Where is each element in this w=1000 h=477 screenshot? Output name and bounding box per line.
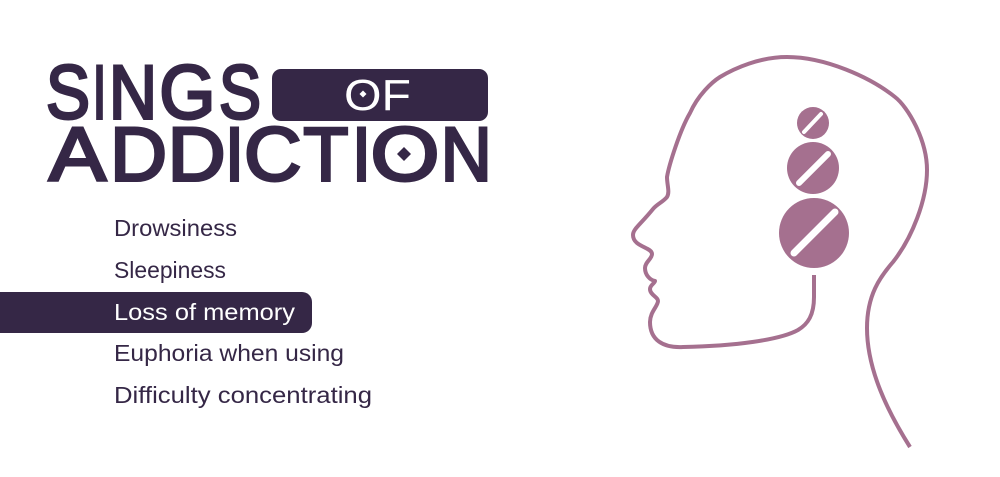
title line: SINGS bbox=[46, 50, 261, 136]
list item: Loss of memory: Loss of memory bbox=[114, 299, 295, 325]
title line: ADDICTION: T bbox=[303, 112, 348, 198]
head profile outline bbox=[633, 57, 927, 447]
title line: ADDICTION: I bbox=[225, 112, 244, 198]
list item: Drowsiness: Drowsiness bbox=[114, 215, 237, 241]
OF badge: OF bbox=[344, 71, 411, 120]
OF badge bbox=[272, 69, 488, 121]
title line: SINGS: N bbox=[109, 50, 157, 136]
list of signs bbox=[0, 215, 372, 408]
title line: SINGS: I bbox=[92, 50, 106, 136]
title line: ADDICTION: D bbox=[168, 112, 226, 198]
title line: ADDICTION: O bbox=[370, 112, 440, 198]
list item: Difficulty concentrating: Difficulty concentrating bbox=[114, 382, 372, 408]
title line: ADDICTION: I bbox=[352, 112, 371, 198]
title bbox=[46, 50, 492, 198]
list item: Sleepiness: Sleepiness bbox=[114, 257, 226, 283]
title line: ADDICTION: N bbox=[441, 112, 492, 198]
icon: large pill bbox=[779, 198, 849, 268]
title line: ADDICTION bbox=[49, 112, 492, 198]
diamond in ADDICTION O bbox=[397, 147, 411, 161]
title line: ADDICTION: C bbox=[244, 112, 302, 198]
title line: ADDICTION: D bbox=[110, 112, 167, 198]
title line: ADDICTION: A bbox=[49, 112, 106, 198]
title line: SINGS: S bbox=[46, 50, 90, 136]
icon: medium pill bbox=[787, 142, 839, 194]
title line: SINGS: G bbox=[159, 50, 215, 136]
list item: Euphoria when using: Euphoria when using bbox=[114, 340, 344, 366]
highlighted bar bbox=[0, 292, 312, 333]
icon: small pill bbox=[797, 107, 829, 139]
title line: SINGS: S bbox=[219, 50, 261, 136]
